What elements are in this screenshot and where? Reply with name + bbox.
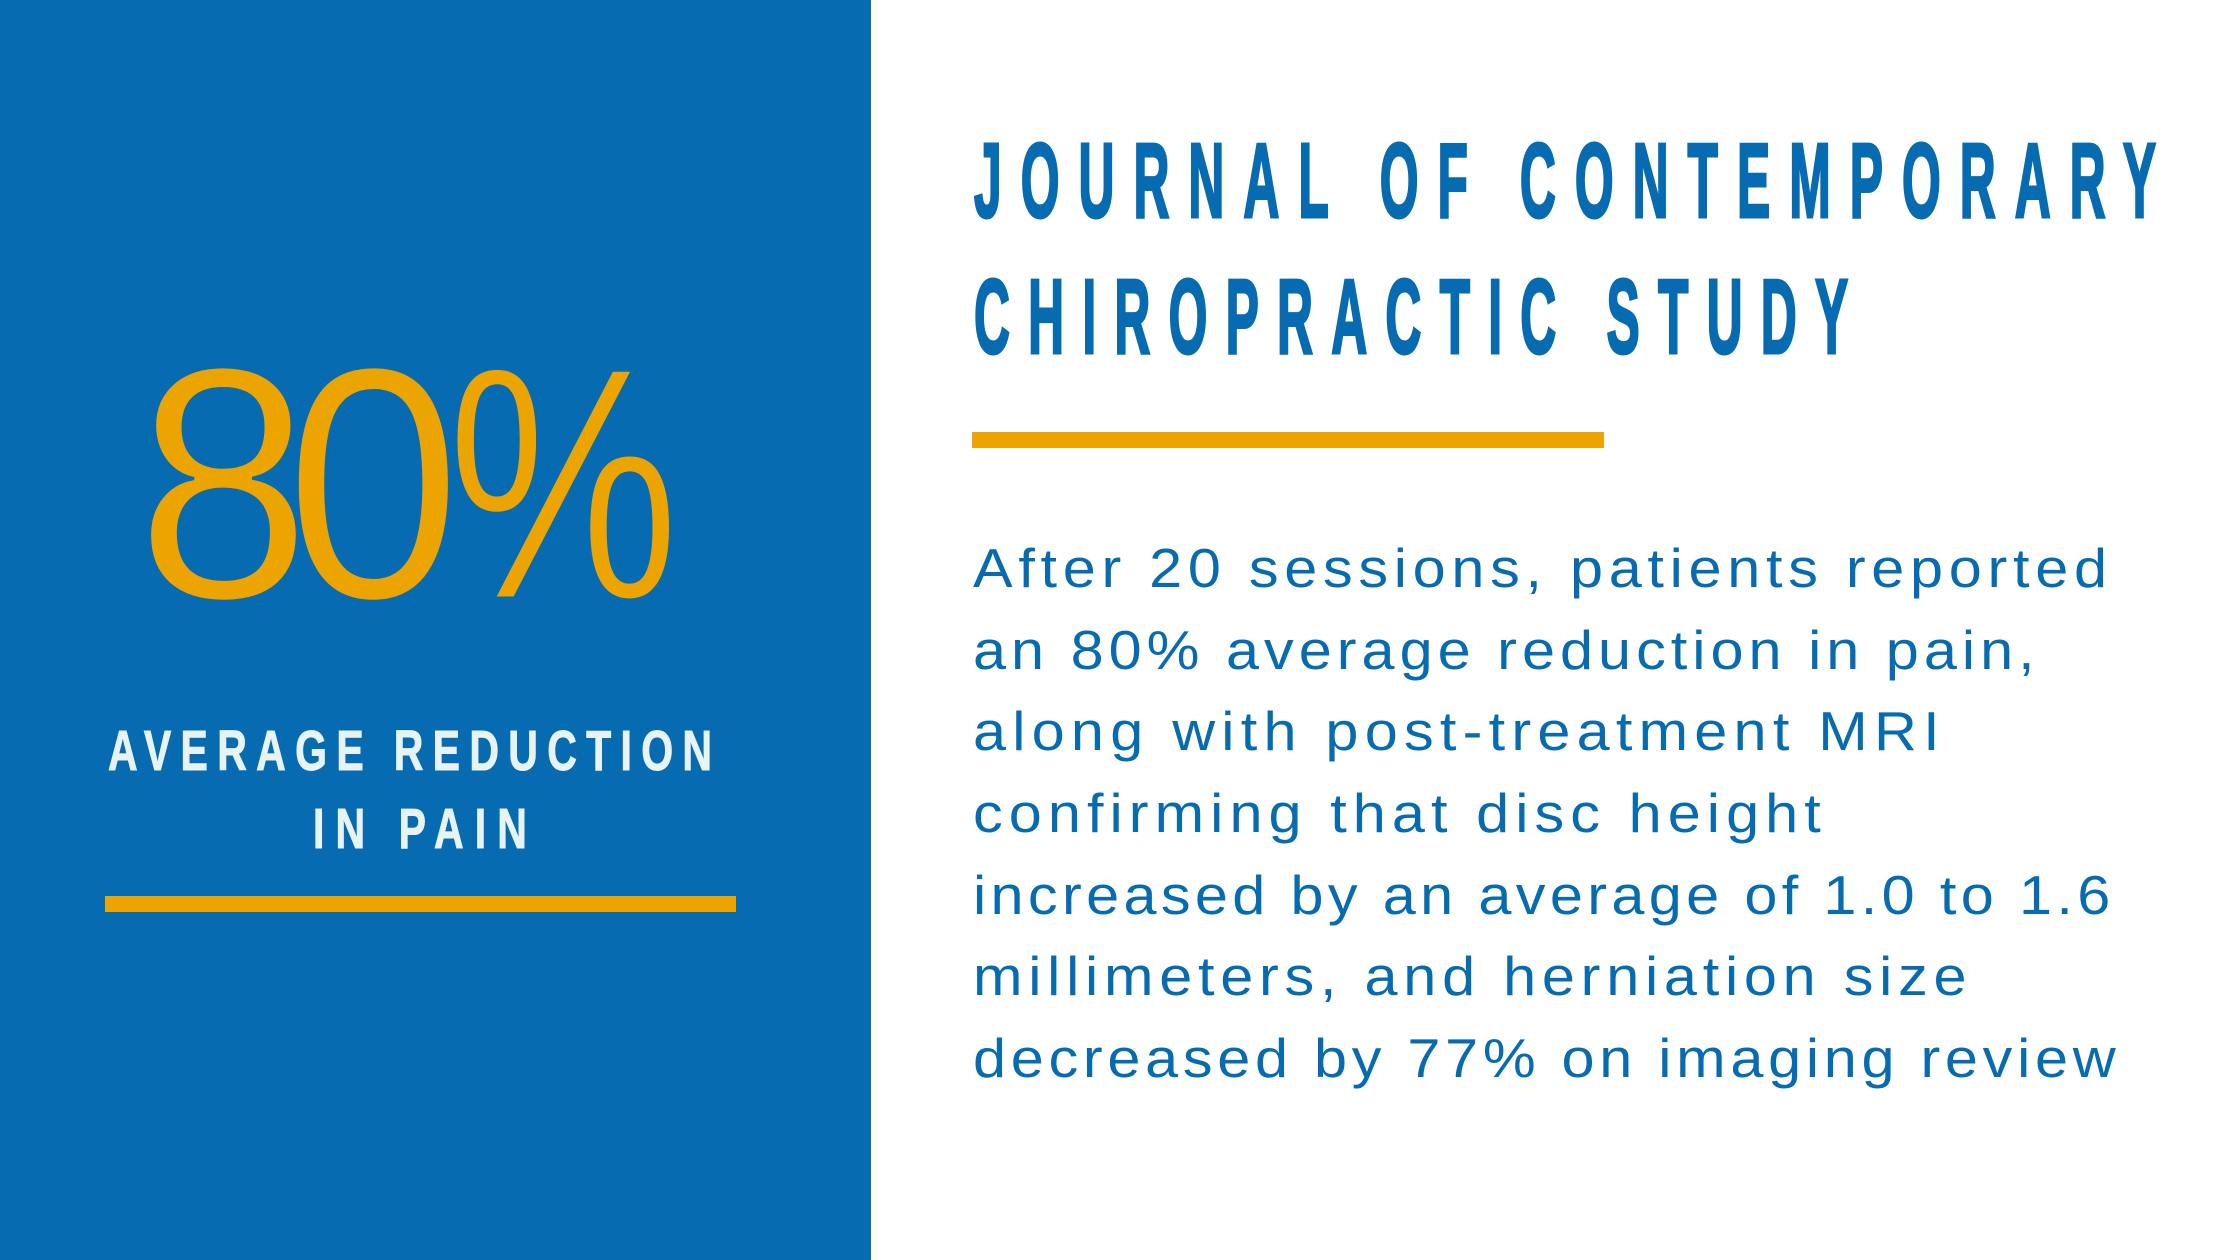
body paragraph: After 20 sessions, patients reported [973,538,2107,599]
body paragraph: millimeters, and herniation size [973,946,1967,1007]
panel: study text [972,121,2156,1089]
body paragraph: along with post-treatment MRI [973,701,1940,762]
statistic label [108,718,712,861]
statistic label: AVERAGE REDUCTION [108,718,712,783]
big number: 80%: 0 [285,298,462,668]
heading: JOURNAL OF CONTEMPORARY [974,121,2156,240]
panel background [0,0,871,1260]
body paragraph: an 80% average reduction in pain, [973,620,2035,681]
panel: statistic [0,0,871,1260]
body paragraph: increased by an average of 1.0 to 1.6 [973,865,2110,926]
big number: 80%: % [447,299,680,669]
big number: 80% [136,298,680,669]
heading: CHIROPRACTIC STUDY [974,257,1848,376]
statistic label: IN PAIN [313,796,527,861]
heading underline [972,432,1604,448]
big number: 80%: 8 [136,300,311,669]
body paragraph: decreased by 77% on imaging review [973,1028,2116,1089]
body paragraph [973,538,2116,1089]
statistic underline [105,896,736,912]
body paragraph: confirming that disc height [973,783,1821,844]
heading [974,121,2156,376]
